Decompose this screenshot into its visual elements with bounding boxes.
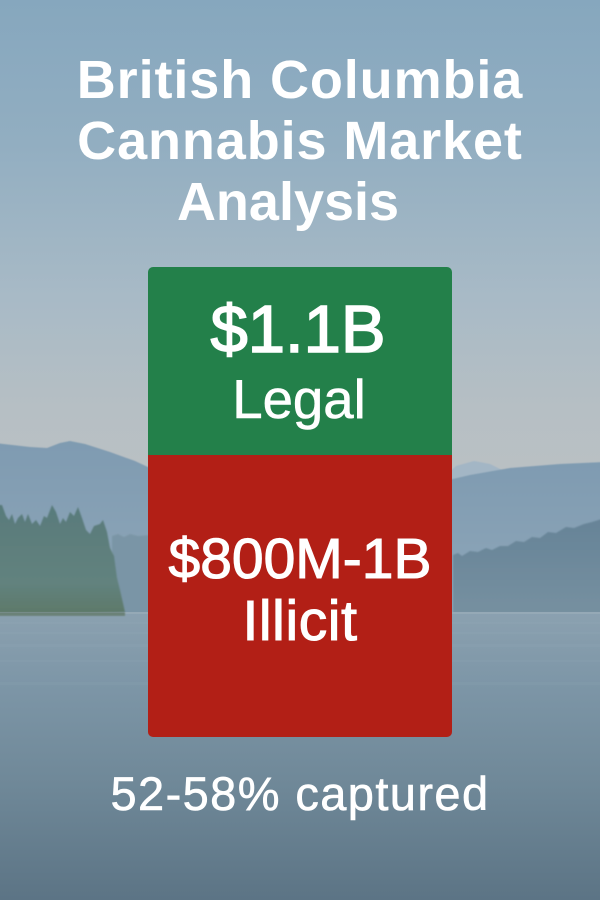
- title: [77, 50, 523, 232]
- title: Cannabis Market: [77, 111, 523, 171]
- legal label: Legal: [232, 369, 366, 430]
- illicit value: $800M-1B: [168, 527, 432, 591]
- illicit label: Illicit: [242, 589, 358, 653]
- panel: legal market: [148, 267, 452, 455]
- title: British Columbia: [77, 50, 523, 110]
- panel: illicit market: [148, 455, 452, 737]
- stacked bar chart: [148, 267, 452, 737]
- title: Analysis: [177, 172, 399, 232]
- capture rate caption: 52-58% captured: [111, 767, 489, 820]
- legal value: $1.1B: [210, 292, 386, 367]
